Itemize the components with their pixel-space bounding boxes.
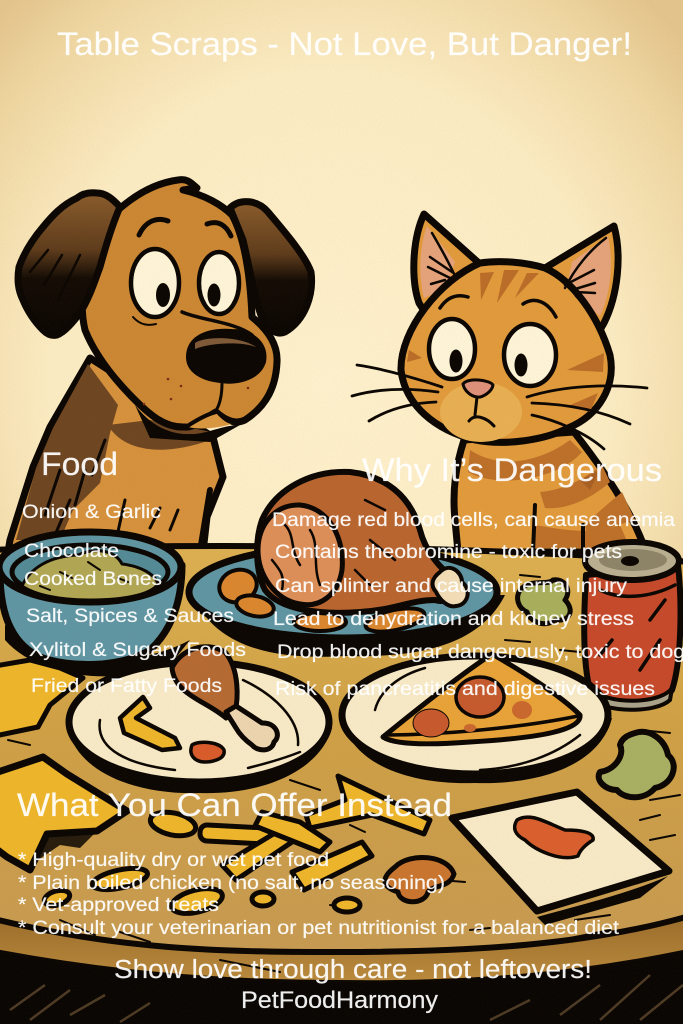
list: foods: Xylitol & Sugary Foods [29, 640, 246, 661]
list: alternatives: * Consult your veterinarian or pet nutritionist for a balanced diet [18, 918, 620, 939]
cat brows [440, 296, 556, 317]
cat right inner ear [566, 236, 611, 316]
dog brows [139, 219, 231, 236]
food: bowl [0, 532, 190, 676]
napkin sauce [515, 817, 593, 858]
dog head [82, 180, 277, 427]
roast ham [257, 472, 456, 613]
list: foods: Salt, Spices & Sauces [26, 606, 234, 627]
heading: what you can offer instead: What You Can Offer Instead [17, 787, 452, 823]
food: green leaf [518, 580, 570, 624]
food: top-left chip [0, 660, 83, 736]
list: foods: Onion & Garlic [22, 502, 161, 523]
cat nose and mouth [463, 380, 494, 426]
ham cut face [258, 505, 342, 605]
cat whiskers [352, 365, 647, 449]
list: foods: Cooked Bones [24, 569, 162, 590]
dog right ear [230, 202, 312, 333]
dog nose [182, 312, 265, 383]
plate nuggets [215, 564, 426, 636]
food: lower-right leaf [599, 732, 674, 797]
list: dangers: Damage red blood cells, can cause anemia [272, 510, 675, 531]
table side [0, 915, 693, 983]
cat head [401, 262, 611, 442]
list: dangers [272, 510, 696, 700]
heading: why it's dangerous: Why It’s Dangerous [362, 452, 662, 488]
cat left inner ear [420, 226, 455, 298]
illustration: dog [8, 180, 312, 552]
food: large chip [0, 757, 127, 870]
cat left ear [414, 214, 480, 330]
list: alternatives: * Vet-approved treats [18, 895, 219, 916]
brand name: PetFoodHarmony [241, 987, 438, 1014]
dog left ear fur [28, 248, 82, 278]
list: dangers: Drop blood sugar dangerously, toxic to dogs [277, 642, 696, 663]
heading: food: Food [41, 446, 118, 482]
illustration: cat [352, 214, 647, 552]
food: left plate with drumstick [68, 647, 332, 793]
floor [0, 951, 693, 1024]
closing message: Show love through care - not leftovers! [114, 956, 592, 984]
sauce smear [191, 742, 224, 762]
list: alternatives: * High-quality dry or wet pet food [18, 850, 329, 871]
dog body [8, 358, 223, 552]
cat right ear [545, 226, 618, 330]
cat muzzle [440, 382, 522, 442]
fries on plate [120, 697, 180, 750]
list: dangers: Lead to dehydration and kidney stress [273, 609, 634, 630]
cat stripes [407, 270, 604, 412]
list: dangers: Can splinter and cause internal injury [275, 576, 628, 597]
table hatch marks [8, 575, 680, 972]
dog eyes [131, 249, 239, 325]
food: right plate with pizza [342, 654, 612, 783]
drumstick [172, 647, 237, 718]
napkin [452, 792, 669, 925]
list: foods: Fried or Fatty Foods [31, 676, 222, 697]
list: dangers: Contains theobromine - toxic for pets [275, 542, 622, 563]
food: sauce blob [385, 857, 454, 902]
table top [0, 546, 693, 952]
list: foods: Chocolate [24, 541, 119, 562]
food: scattered fries [43, 776, 430, 918]
list: dangers: Risk of pancreatitis and digestive issues [275, 679, 655, 700]
list: foods [22, 502, 246, 697]
food: soda can [584, 542, 680, 710]
table back edge [0, 546, 693, 562]
cat body [454, 432, 646, 552]
list: alternatives [18, 850, 620, 939]
title: Table Scraps - Not Love, But Danger! [57, 26, 632, 62]
food: blue plate [189, 472, 505, 657]
ham bone [433, 568, 468, 606]
dog mouth [143, 378, 249, 428]
cat eyes [429, 319, 556, 386]
cat ear lines [426, 232, 608, 300]
dog chin shadow [135, 405, 240, 442]
list: alternatives: * Plain boiled chicken (no salt, no seasoning) [18, 873, 445, 894]
dog left ear [18, 193, 120, 335]
bowl food [22, 551, 158, 600]
pizza slice [383, 654, 580, 744]
